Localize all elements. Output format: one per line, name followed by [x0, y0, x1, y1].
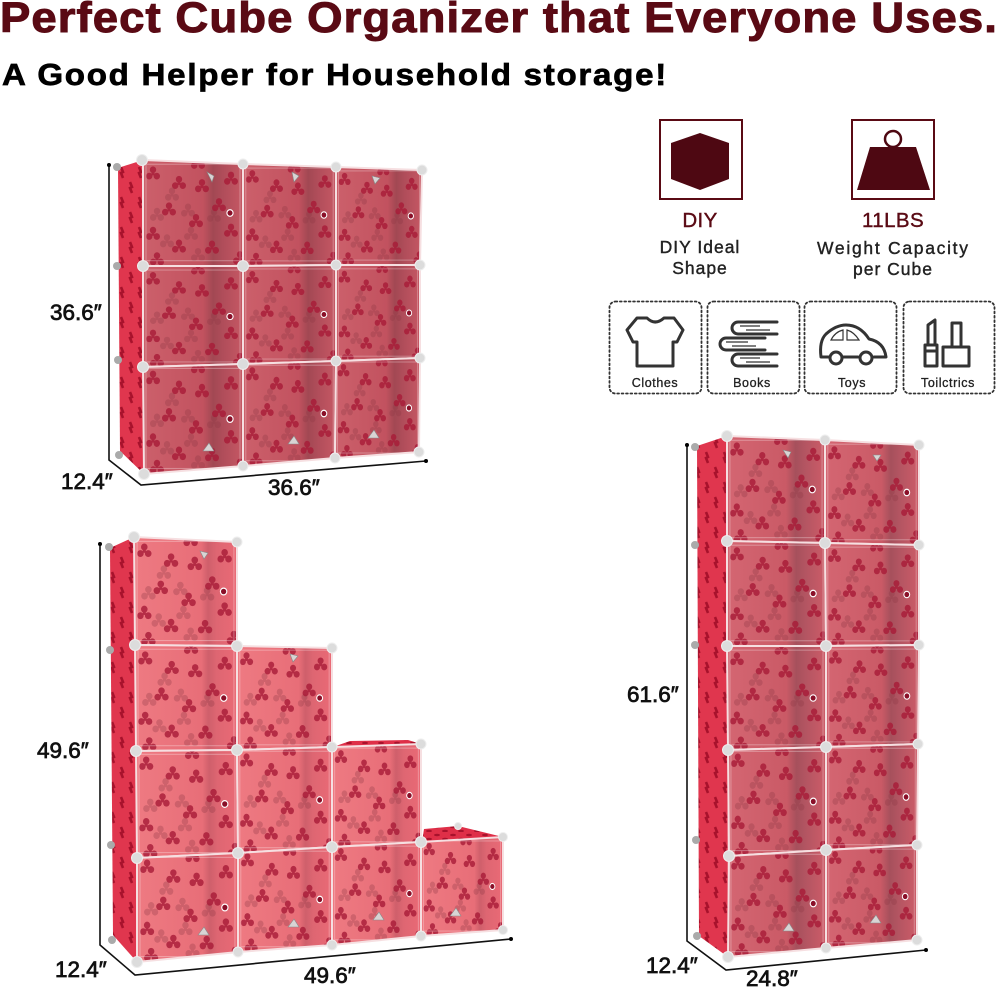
feature: DIY shape: Shape — [672, 258, 728, 278]
dimensions: tower unit — [627, 443, 928, 991]
organizer: 3 by 3 cube unit — [113, 154, 427, 480]
dimensions: 3 by 3 unit — [50, 163, 428, 500]
organizer: 2 by 5 tower unit — [691, 430, 924, 962]
icon: hexagon — [660, 120, 742, 199]
dimensions: 3 by 3 unit: 12.4″ — [61, 469, 113, 494]
icon: weight — [852, 120, 934, 199]
clips — [203, 172, 380, 451]
dimensions: tower unit: 61.6″ — [627, 682, 679, 707]
feature: DIY shape: DIY — [682, 209, 718, 232]
cube fronts — [727, 436, 919, 957]
subtitle: A Good Helper for Household storage! — [2, 58, 668, 92]
item: books — [708, 302, 800, 394]
item: toys — [804, 302, 896, 394]
cube fronts — [134, 537, 503, 962]
dimensions: staircase unit: 12.4″ — [55, 957, 107, 982]
connectors — [128, 532, 508, 968]
organizer: staircase unit — [105, 532, 508, 968]
item: books: Books — [733, 376, 771, 390]
dimensions: 3 by 3 unit: 36.6″ — [50, 300, 102, 325]
dimensions: tower unit: 12.4″ — [646, 953, 698, 978]
side panel — [110, 537, 137, 962]
icon: car — [821, 325, 886, 364]
clips — [198, 551, 461, 935]
dimensions: staircase unit: 49.6″ — [37, 738, 89, 763]
top panels — [333, 740, 421, 747]
icon: lipstick and nail polish — [925, 320, 969, 366]
connectors — [136, 154, 427, 480]
dimensions: staircase unit — [37, 542, 513, 988]
item: toys: Toys — [838, 376, 866, 390]
cube fronts — [143, 160, 422, 474]
side panel — [697, 436, 728, 957]
feature: weight capacity: per Cube — [853, 259, 933, 279]
icon: books — [720, 322, 777, 366]
feature: weight capacity — [817, 120, 969, 279]
feature: DIY shape — [660, 120, 742, 278]
dimensions: tower unit: 24.8″ — [746, 966, 798, 991]
feature: DIY shape: DIY Ideal — [660, 237, 740, 257]
item: toiletries: Toilctrics — [921, 376, 975, 390]
item: toiletries — [904, 302, 994, 394]
dimensions: staircase unit: 49.6″ — [304, 963, 356, 988]
dimensions: 3 by 3 unit: 36.6″ — [268, 475, 320, 500]
side panel — [118, 160, 144, 474]
clips — [783, 450, 881, 931]
item: clothes — [610, 302, 702, 394]
connectors — [722, 430, 924, 962]
feature: weight capacity: Weight Capacity — [817, 238, 969, 258]
feature: weight capacity: 11LBS — [862, 209, 924, 232]
icon: t-shirt — [627, 318, 683, 366]
item: clothes: Clothes — [632, 376, 678, 390]
